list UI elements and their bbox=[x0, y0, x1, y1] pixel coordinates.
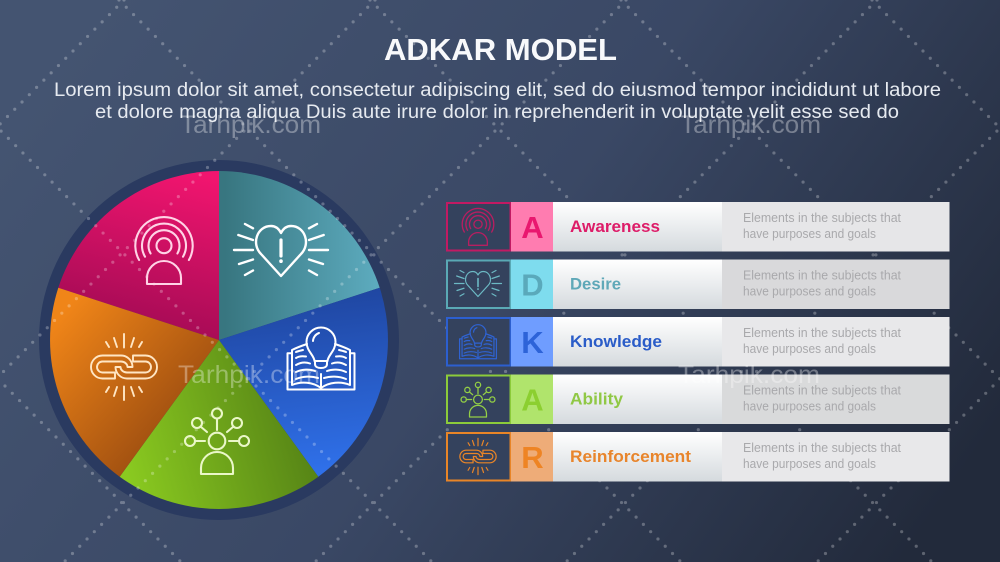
pie outer ring bbox=[39, 160, 399, 520]
icon box bbox=[447, 318, 510, 366]
name box: Awareness bbox=[570, 217, 660, 236]
letter box bbox=[511, 260, 553, 309]
name box: Reinforcement bbox=[570, 447, 691, 466]
letter box: K bbox=[521, 325, 544, 360]
watermarks: Tarhpik.com bbox=[180, 111, 321, 139]
description box bbox=[722, 374, 950, 424]
icon: awareness person with signal bbox=[135, 217, 193, 284]
description box bbox=[722, 202, 950, 252]
icon: heart with exclamation bbox=[234, 224, 328, 276]
slice: desire bbox=[219, 171, 380, 340]
icon: network person bbox=[185, 408, 249, 474]
watermarks: Tarhpik.com bbox=[678, 361, 820, 389]
icon: book with light bulb bbox=[288, 328, 354, 390]
letter box: D bbox=[521, 268, 544, 302]
description box bbox=[722, 432, 950, 482]
title: ADKAR MODEL bbox=[384, 32, 617, 67]
name box bbox=[553, 260, 722, 309]
name box: Ability bbox=[570, 390, 624, 408]
slice: reinforcement bbox=[50, 288, 219, 477]
intro text: et dolore magna aliqua Duis aute irure dolor in reprehenderit in voluptate velit esse sed do bbox=[95, 102, 899, 123]
description box: Elements in the subjects that bbox=[743, 268, 902, 282]
row: reinforcement bbox=[447, 432, 950, 482]
description box: Elements in the subjects that bbox=[743, 384, 902, 398]
name box: Desire bbox=[570, 274, 621, 294]
description box bbox=[722, 317, 950, 366]
row: desire bbox=[447, 260, 950, 309]
row: ability bbox=[447, 374, 950, 424]
icon box bbox=[447, 433, 510, 480]
letter box bbox=[511, 374, 553, 424]
slice: ability bbox=[120, 340, 318, 509]
letter box: A bbox=[521, 210, 544, 245]
intro text: Lorem ipsum dolor sit amet, consectetur adipiscing elit, sed do eiusmod tempor incididunt ut labore bbox=[54, 80, 941, 101]
icon box bbox=[447, 203, 510, 250]
letter box: A bbox=[521, 382, 544, 418]
name box bbox=[553, 374, 722, 424]
description box: Elements in the subjects that bbox=[743, 326, 902, 340]
icon: chain link bbox=[91, 334, 157, 400]
pie chart bbox=[39, 160, 399, 520]
row: knowledge bbox=[447, 317, 950, 366]
name box: Knowledge bbox=[570, 332, 662, 351]
description box: have purposes and goals bbox=[743, 227, 876, 241]
description box: Elements in the subjects that bbox=[743, 441, 902, 455]
icon box bbox=[447, 376, 510, 423]
description box: have purposes and goals bbox=[743, 457, 876, 471]
description box: have purposes and goals bbox=[743, 400, 876, 414]
slice: knowledge bbox=[219, 288, 388, 477]
letter box: R bbox=[521, 440, 544, 475]
description box: have purposes and goals bbox=[743, 342, 876, 356]
watermarks: Tarhpik.com bbox=[680, 111, 821, 139]
description box: Elements in the subjects that bbox=[743, 211, 902, 225]
description box: have purposes and goals bbox=[743, 284, 876, 298]
row: awareness bbox=[447, 202, 950, 252]
name box bbox=[553, 317, 722, 366]
icon box bbox=[447, 260, 510, 308]
intro text bbox=[54, 80, 941, 123]
slice: awareness bbox=[58, 171, 219, 340]
letter box bbox=[511, 202, 553, 252]
name box bbox=[553, 432, 722, 482]
watermarks bbox=[178, 111, 821, 389]
letter box bbox=[511, 432, 553, 482]
letter box bbox=[511, 317, 553, 366]
name box bbox=[553, 202, 722, 252]
watermarks: Tarhpik.com bbox=[178, 361, 320, 389]
description box bbox=[722, 260, 950, 309]
